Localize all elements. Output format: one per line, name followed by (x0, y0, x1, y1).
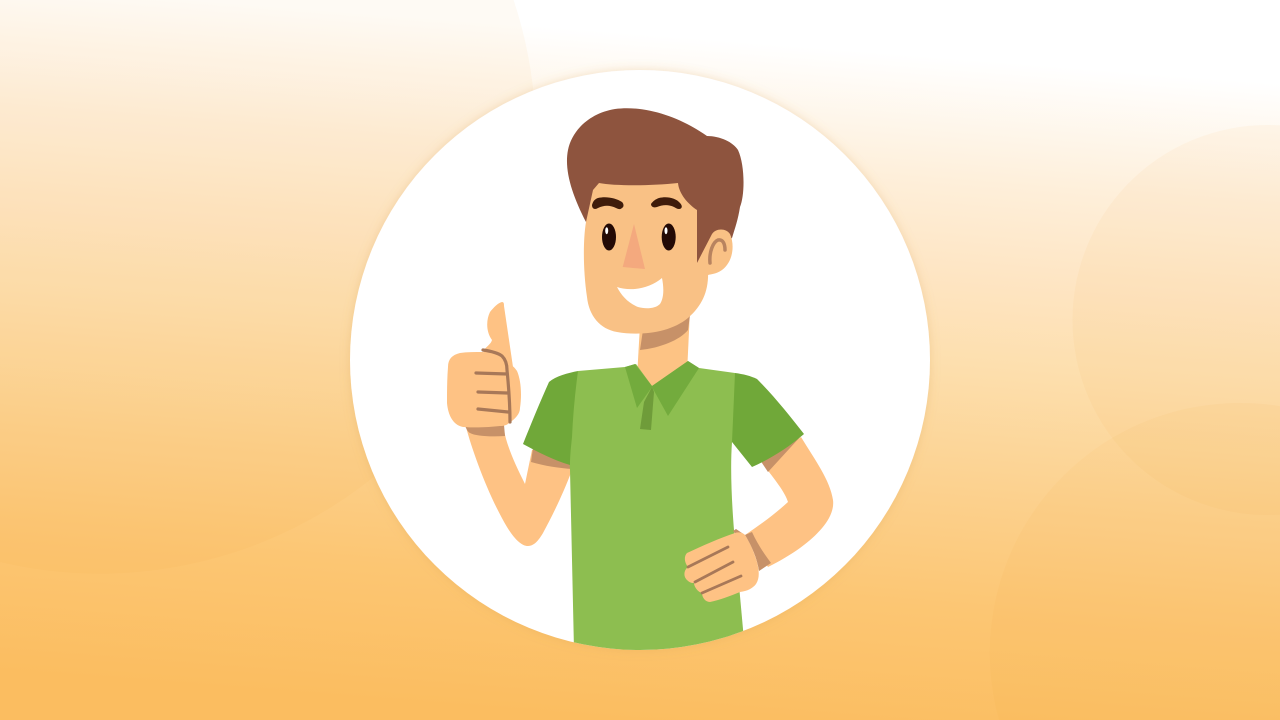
ear (697, 230, 733, 275)
white circle panel (350, 70, 930, 650)
wrist band (733, 529, 771, 571)
right sleeve shadow (762, 438, 800, 472)
shirt body (565, 361, 745, 650)
left eye (602, 224, 616, 250)
right hand (684, 532, 759, 602)
man figure (447, 108, 833, 650)
left eyebrow (592, 197, 624, 209)
right eye (662, 224, 676, 250)
neck shadow (640, 315, 690, 350)
hair (567, 108, 744, 263)
neck (638, 316, 690, 386)
left sleeve shadow (531, 448, 572, 469)
face (584, 183, 708, 334)
smile (617, 278, 663, 308)
hand finger lines (688, 547, 741, 593)
right eyebrow (651, 197, 682, 209)
ear detail (710, 240, 725, 263)
thumb (483, 302, 513, 366)
nose (623, 224, 645, 269)
raised left arm (466, 427, 575, 546)
right sleeve (732, 373, 804, 467)
right arm (745, 437, 833, 567)
fist finger lines (476, 350, 510, 422)
wrist shadow (465, 425, 505, 436)
collar (625, 361, 699, 416)
left sleeve (523, 371, 578, 465)
fist (447, 352, 521, 427)
placket (640, 387, 654, 430)
